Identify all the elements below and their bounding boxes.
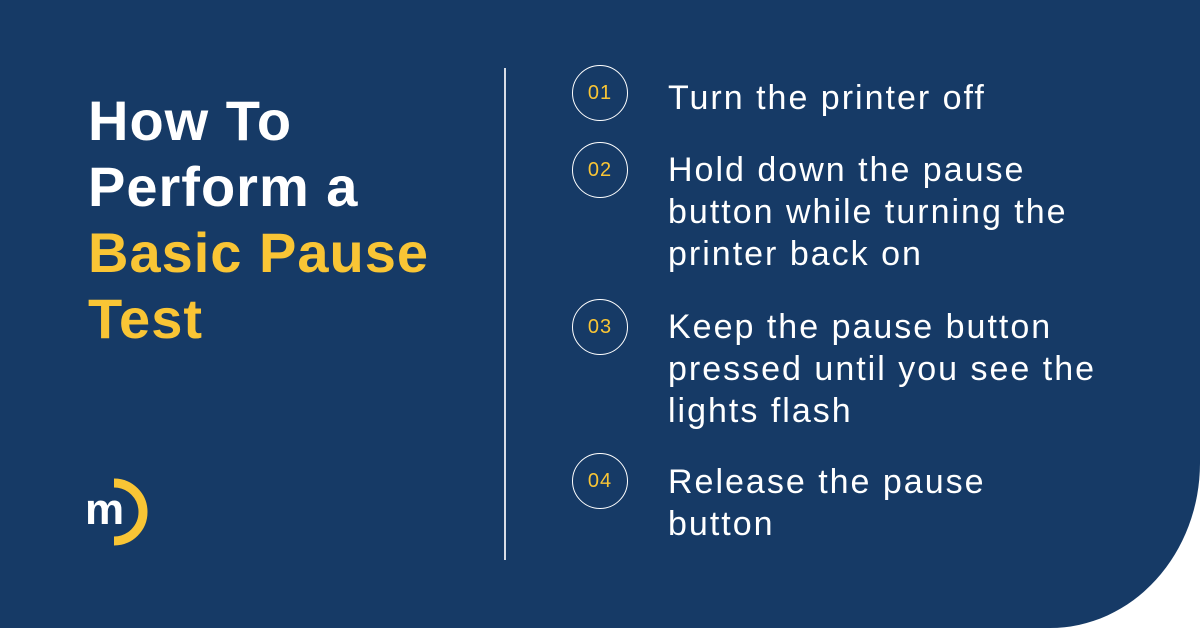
text: printer back on bbox=[668, 235, 923, 273]
title: Perform a bbox=[88, 155, 358, 218]
step 2 bbox=[572, 142, 1068, 273]
text: Release the pause bbox=[668, 463, 986, 501]
text: 01 bbox=[588, 82, 612, 104]
icon: logo bbox=[85, 478, 148, 546]
title bbox=[88, 89, 429, 350]
text: lights flash bbox=[668, 392, 853, 430]
text: Keep the pause button bbox=[668, 308, 1052, 346]
text: 02 bbox=[588, 159, 612, 181]
text: 03 bbox=[588, 316, 612, 338]
text: Hold down the pause bbox=[668, 151, 1025, 189]
text: button while turning the bbox=[668, 193, 1068, 231]
title: Test bbox=[88, 287, 203, 350]
text: button bbox=[668, 505, 775, 543]
icon: logo: m bbox=[85, 485, 124, 534]
text: 04 bbox=[588, 470, 612, 492]
step 4 bbox=[572, 453, 986, 543]
title: How To bbox=[88, 89, 292, 152]
step 1 bbox=[572, 65, 986, 121]
text: pressed until you see the bbox=[668, 350, 1096, 388]
step 3 bbox=[572, 299, 1096, 430]
text: Turn the printer off bbox=[668, 79, 986, 117]
title: Basic Pause bbox=[88, 221, 429, 284]
